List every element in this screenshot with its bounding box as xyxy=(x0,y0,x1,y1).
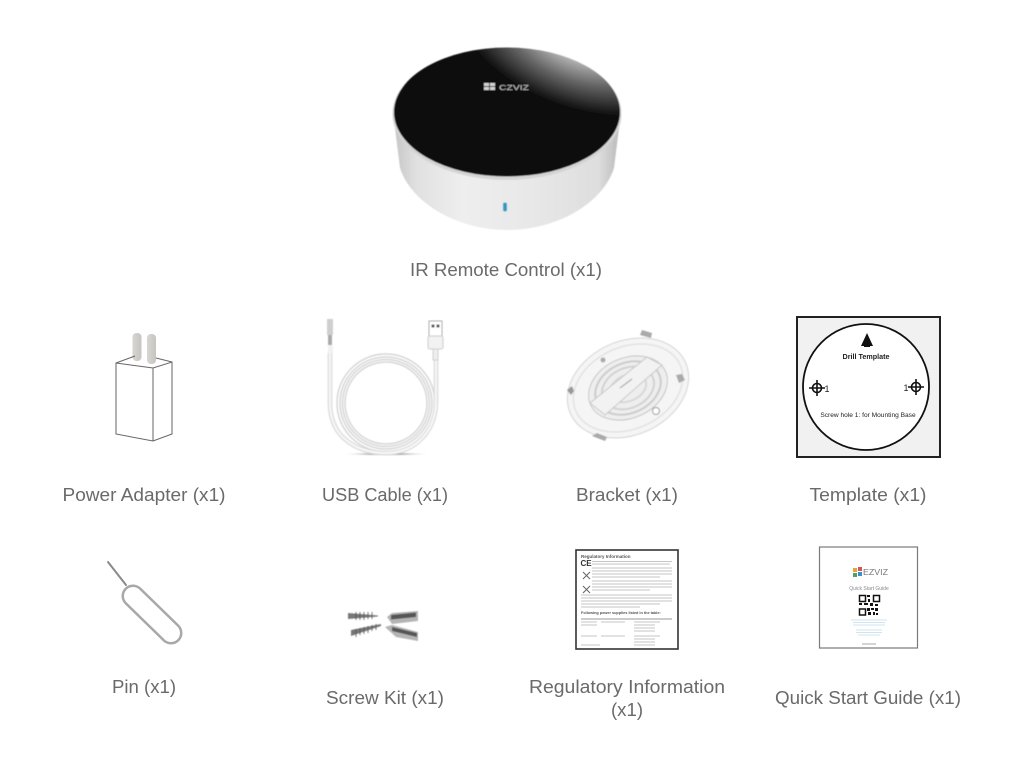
panel: IR remote control xyxy=(392,48,622,280)
icon: quick start guide booklet: EZVIZ xyxy=(863,568,888,577)
icon: QR code xyxy=(859,595,880,615)
label: Screw Kit: Screw Kit (x1) xyxy=(326,687,444,708)
label: Regulatory Information: Regulatory Information xyxy=(529,676,725,697)
panel: quick start guide xyxy=(775,547,961,708)
icon: drill template: 1 xyxy=(824,384,830,394)
icon: SIM eject pin xyxy=(108,562,171,633)
panel: regulatory information xyxy=(529,550,725,720)
icon: regulatory information sheet xyxy=(576,550,678,649)
icon: drill template xyxy=(797,317,940,457)
label: Quick Start Guide: Quick Start Guide (x1) xyxy=(775,687,961,708)
label: Pin: Pin (x1) xyxy=(112,676,176,697)
label: Regulatory Information: (x1) xyxy=(611,699,643,720)
label: Bracket: Bracket (x1) xyxy=(576,484,678,505)
icon: blue status LED xyxy=(503,202,507,212)
icon: regulatory information sheet: CE xyxy=(580,559,592,568)
label: Template: Template (x1) xyxy=(810,484,926,505)
label: Power Adapter: Power Adapter (x1) xyxy=(62,484,226,505)
panel: template xyxy=(797,317,940,505)
icon: drill template: Screw hole 1: for Mounting Base xyxy=(820,412,916,419)
label: IR Remote Control: IR Remote Control (x1) xyxy=(410,259,602,280)
icon: regulatory information sheet: Regulatory Information xyxy=(581,554,631,559)
icon: bracket xyxy=(551,319,705,457)
logo: CZVIZ: CZVIZ xyxy=(499,83,530,92)
icon: USB cable xyxy=(327,319,443,456)
panel: screw kit xyxy=(326,611,444,708)
icon: drill template: 1 xyxy=(903,383,909,393)
panel: USB cable xyxy=(322,319,448,505)
logo: CZVIZ xyxy=(484,83,530,92)
icon: drill template: Drill Template xyxy=(842,352,890,361)
label: USB Cable: USB Cable (x1) xyxy=(322,484,448,505)
icon: quick start guide booklet: Quick Start Guide xyxy=(849,586,889,592)
icon: quick start guide booklet xyxy=(820,547,918,648)
icon: IR remote control device xyxy=(392,48,622,230)
icon: power adapter xyxy=(116,333,172,441)
icon: regulatory information sheet: Following power supplies listed in the table: xyxy=(581,611,661,615)
panel: power adapter xyxy=(62,333,226,505)
panel: pin xyxy=(108,562,176,697)
icon: screws and wall anchors xyxy=(348,611,418,641)
panel: bracket xyxy=(551,319,705,505)
